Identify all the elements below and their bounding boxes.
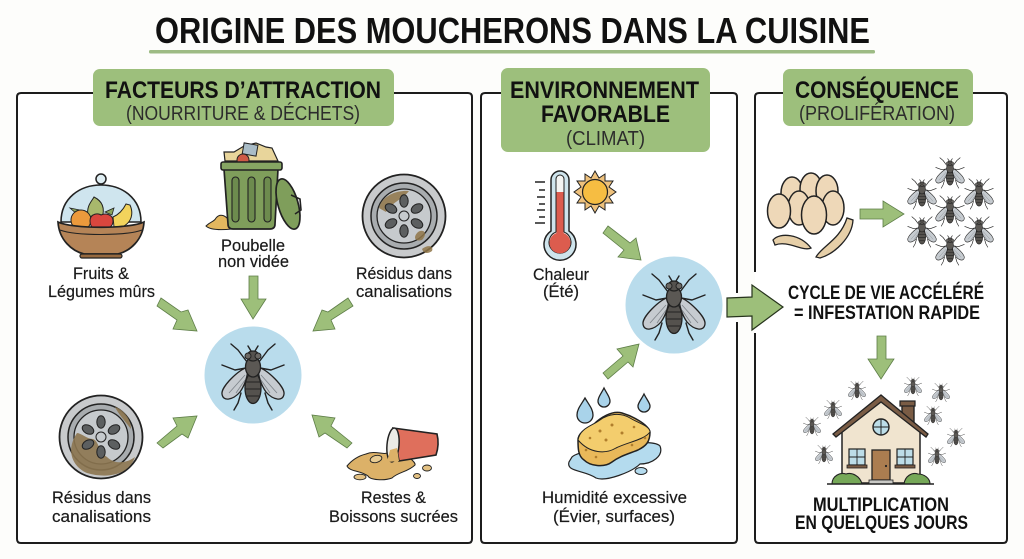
arrow: drain to fly [313, 298, 353, 331]
label: fruits: Fruits & [73, 264, 130, 283]
label: poubelle: non vidée [218, 252, 289, 271]
panel: consequence [755, 69, 1007, 543]
label: residus bottom: canalisations [52, 507, 151, 526]
text: cycle de vie: CYCLE DE VIE ACCÉLÉRÉ [788, 282, 984, 304]
label: humidite: (Évier, surfaces) [553, 507, 675, 526]
label: residus bottom [52, 488, 151, 526]
icon: group of flies [908, 158, 993, 265]
label: restes [329, 488, 458, 526]
label: residus top: canalisations [356, 282, 452, 301]
heading badge: consequence [783, 69, 973, 126]
icon: sponge on puddle [569, 412, 661, 479]
arrow: cycle to house [868, 336, 894, 379]
icon: drain top right [362, 174, 446, 258]
label: chaleur: Chaleur [533, 265, 589, 284]
label: poubelle: Poubelle [221, 236, 285, 255]
icon: thermometer [535, 171, 576, 260]
icon: eggs and larvae [768, 173, 853, 258]
text: multiplication [795, 495, 968, 534]
arrow: lower drain to fly [157, 416, 197, 448]
arrow: trash to fly [241, 276, 266, 319]
arrow: fruits to fly [157, 298, 197, 331]
heading badge: environnement: FAVORABLE [541, 101, 670, 128]
heading badge: environnement [501, 68, 710, 152]
icon: house with flies [803, 377, 965, 484]
text: cycle de vie: = INFESTATION RAPIDE [794, 303, 980, 324]
heading badge: environnement: (CLIMAT) [566, 128, 645, 150]
arrow: humidity to fly [603, 344, 639, 379]
title: ORIGINE DES MOUCHERONS DANS LA CUISINE [155, 10, 870, 51]
label: humidite: Humidité excessive [542, 488, 687, 507]
label: poubelle [218, 236, 289, 271]
label: residus top: Résidus dans [356, 264, 452, 283]
icon: fruit bowl [58, 174, 144, 258]
label: residus bottom: Résidus dans [52, 488, 151, 507]
heading badge: environnement: ENVIRONNEMENT [510, 77, 699, 104]
text: cycle de vie [788, 282, 984, 324]
text: multiplication: EN QUELQUES JOURS [795, 513, 968, 534]
heading badge: consequence: (PROLIFÉRATION) [799, 102, 955, 125]
icon: fly in climate panel [626, 256, 722, 354]
panel: facteurs d'attraction [17, 69, 472, 543]
heading badge: facteurs: FACTEURS D’ATTRACTION [105, 77, 381, 104]
icon: water drops [577, 388, 650, 423]
arrow: climate to consequence [727, 285, 783, 330]
text: multiplication: MULTIPLICATION [813, 495, 949, 516]
icon: sun [574, 171, 616, 213]
heading badge: facteurs: (NOURRITURE & DÉCHETS) [126, 102, 360, 125]
arrow: spill to fly [312, 415, 352, 448]
heading badge: facteurs [93, 69, 394, 126]
panel: environnement favorable [481, 68, 737, 543]
label: chaleur: (Été) [543, 282, 579, 301]
heading badge: consequence: CONSÉQUENCE [795, 76, 959, 104]
label: restes: Restes & [361, 488, 427, 507]
title underline [149, 50, 875, 54]
icon: central fly [204, 326, 302, 424]
arrow: heat to fly [603, 226, 641, 260]
label: restes: Boissons sucrées [329, 507, 458, 526]
arrow: eggs to flies [860, 201, 904, 227]
label: chaleur [533, 265, 589, 301]
icon: trash can [206, 143, 305, 232]
label: fruits: Légumes mûrs [48, 282, 155, 301]
icon: spilled cup [347, 428, 438, 480]
label: fruits [48, 264, 155, 301]
label: humidite [542, 488, 687, 526]
icon: drain bottom left [60, 396, 142, 478]
label: residus top [356, 264, 452, 301]
